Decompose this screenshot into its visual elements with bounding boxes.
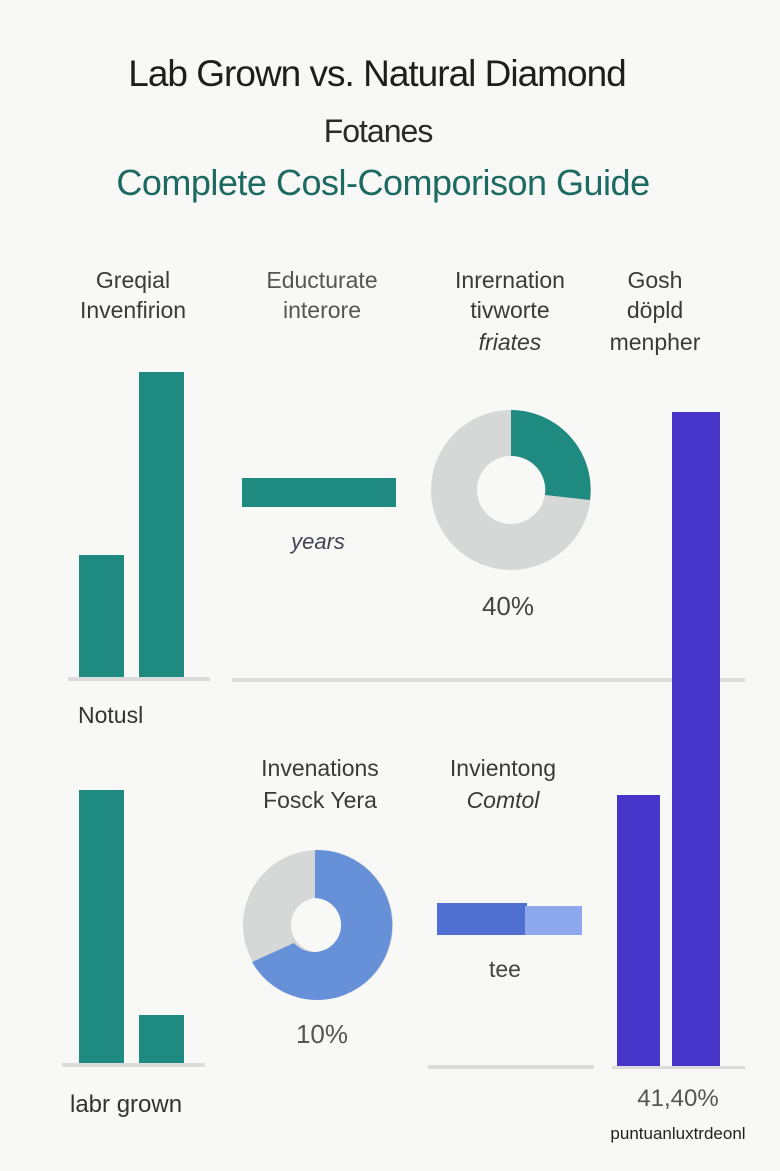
bottom headers [261, 755, 556, 813]
bottom bar chart: lab grown: labr grown [70, 1091, 182, 1118]
column headers: friates [479, 329, 542, 355]
column headers: Gosh [628, 267, 682, 293]
bottom headers: Invientong [450, 755, 556, 781]
donut 10% [252, 850, 392, 1049]
bottom bar chart: lab grown [62, 790, 205, 1118]
horizontal bar: years: yeаrs [289, 529, 345, 554]
bottom headers: Fosck Yera [263, 787, 377, 813]
column headers: interore [283, 297, 361, 323]
column headers: Invenfirion [80, 297, 186, 323]
purple bars [610, 412, 746, 1143]
bottom headers: Invenations [261, 755, 379, 781]
donut 40%: 40% [482, 591, 534, 621]
column headers: Inrernation [455, 267, 565, 293]
purple bars: puntuanluxtrdeonl [610, 1124, 746, 1143]
horizontal bar: tee: tee [489, 956, 521, 982]
donut 40% [427, 410, 745, 682]
title: Lab Grown vs. Natural Diamond [128, 53, 626, 94]
subtitle: Complete Cosl-Comporison Guide [116, 162, 650, 203]
column headers: Educturate [266, 267, 378, 293]
column headers: menpher [610, 329, 701, 355]
top bar chart: natural [68, 372, 210, 728]
donut 10%: 10% [296, 1019, 348, 1049]
column headers: Greqial [96, 267, 170, 293]
column headers [80, 267, 701, 355]
title [128, 53, 626, 149]
top bar chart: natural: Notusl [78, 702, 143, 728]
column headers: tivworte [470, 297, 550, 323]
title: Fotanes [324, 113, 432, 149]
purple bars: 41,40% [637, 1085, 719, 1112]
horizontal bar: years [232, 478, 432, 682]
column headers: döpld [627, 297, 683, 323]
bottom headers: Comtol [467, 787, 540, 813]
horizontal bar: tee [428, 903, 594, 1069]
